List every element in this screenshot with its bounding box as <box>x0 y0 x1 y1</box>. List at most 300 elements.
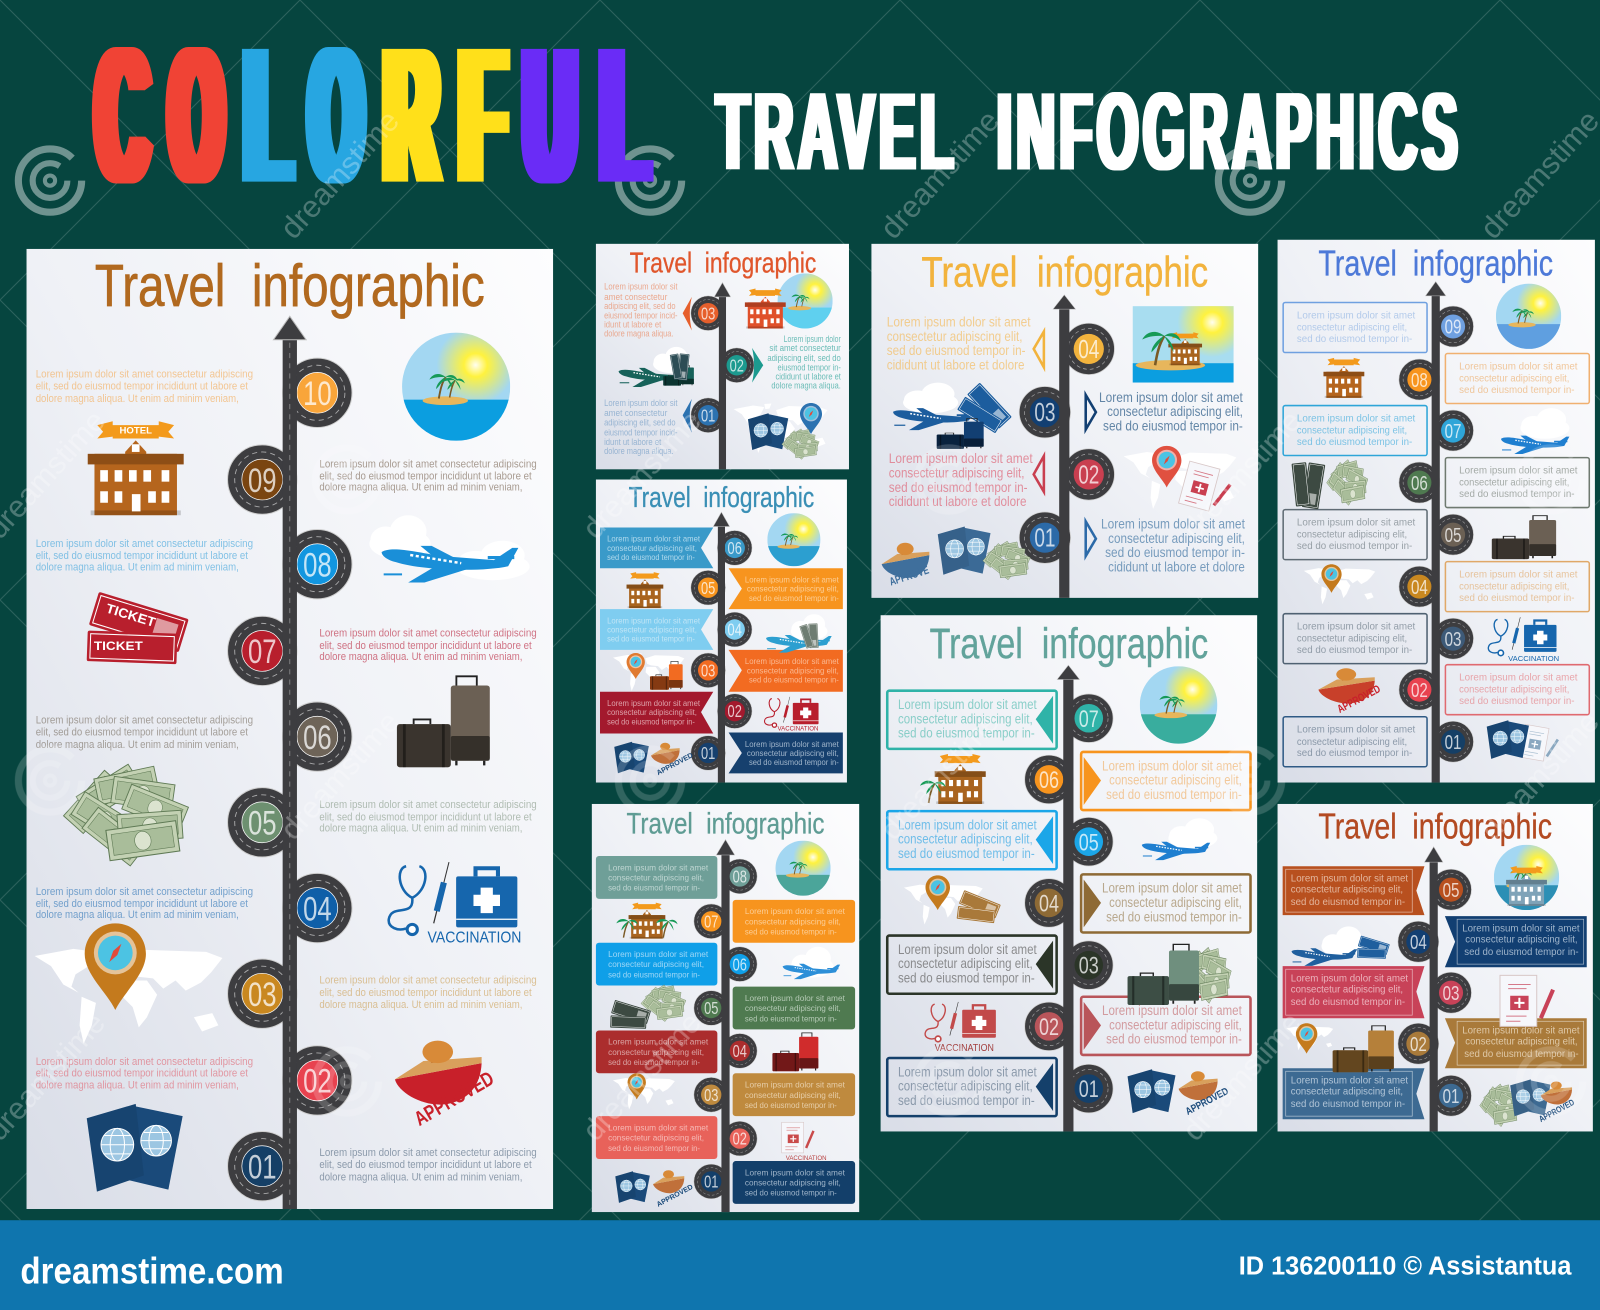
step 05: 05 <box>1079 829 1099 856</box>
step 02: 02 <box>1411 679 1428 702</box>
step 03 <box>1064 941 1113 989</box>
step 04: 04 <box>733 1041 747 1061</box>
text block 02: sit amet consectetur <box>769 343 841 353</box>
box 07: consectetur adipiscing elit, <box>1297 426 1407 437</box>
step 01: 01 <box>1443 1085 1459 1108</box>
icon: passports and stamp <box>615 1170 694 1209</box>
icon: passports and stamp: APPROVED <box>655 1183 694 1209</box>
box 08: sed do eiusmod tempor in- <box>1459 385 1574 396</box>
step 08: 08 <box>1411 369 1428 392</box>
box 06: consectetur adipiscing elit, <box>1109 773 1242 789</box>
box 05: sed do eiusmod tempor in- <box>1297 541 1412 552</box>
step 04: 04 <box>303 890 332 928</box>
step 05: 05 <box>1445 524 1461 547</box>
road with arrow <box>1424 847 1443 1131</box>
icon: plane and tickets <box>1292 926 1390 966</box>
step 09: 09 <box>248 462 277 500</box>
box 03: sed do eiusmod tempor in- <box>1297 645 1412 656</box>
step 07 <box>228 616 297 686</box>
watermarks over panels: dreamstime <box>274 104 406 245</box>
box 05: consectetur adipiscing elit, <box>898 832 1033 848</box>
box 05: sed do eiusmod tempor in- <box>745 1013 837 1023</box>
box 04: sed do eiusmod tempor in- <box>1464 947 1579 958</box>
text block 10 <box>36 368 253 405</box>
text block 03: sed do eiusmod tempor in- <box>1103 419 1243 434</box>
icon: island <box>776 837 833 896</box>
box 02: Lorem ipsum dolor sit amet <box>1102 1003 1242 1019</box>
step 01 <box>1433 721 1474 762</box>
box 05: Lorem ipsum dolor sit amet <box>1291 873 1408 884</box>
text block 03 <box>604 282 678 339</box>
box 04 <box>600 609 713 650</box>
box 05: sed do eiusmod tempor in- <box>898 846 1035 862</box>
step 05 <box>1431 869 1471 910</box>
box 07 <box>887 691 1057 749</box>
icon: plane and tickets <box>766 614 832 653</box>
text block 03 <box>319 975 537 1011</box>
box 03: consectetur adipiscing elit, <box>747 665 839 675</box>
icon: island <box>1496 280 1564 349</box>
box 03: sed do eiusmod tempor in- <box>898 971 1035 986</box>
step 07: 07 <box>704 911 718 931</box>
icon: plane <box>1501 408 1569 454</box>
step 03: 03 <box>248 976 277 1014</box>
arrow: orange <box>683 297 692 331</box>
box 01: sed do eiusmod tempor in- <box>749 757 839 767</box>
text block 04: consectetur adipiscing elit, <box>887 329 1022 344</box>
step 07: 07 <box>248 633 277 671</box>
step 08: 08 <box>303 546 332 584</box>
step 06: 06 <box>733 954 747 974</box>
text block 09 <box>319 458 537 494</box>
box 04: Lorem ipsum dolor sit amet <box>608 1037 709 1047</box>
text block 03: Lorem ipsum dolor sit amet <box>1099 390 1243 405</box>
watermarks over panels <box>0 104 1600 1147</box>
title: Travel Infographics: TRAVEL <box>716 70 958 193</box>
box 04: Lorem ipsum dolor sit amet <box>607 615 701 625</box>
road with arrow <box>273 316 306 1209</box>
icon: stamp approved: APPROVED <box>1336 683 1383 716</box>
step 08: 08 <box>733 867 747 887</box>
text block 03: idunt ut labore et <box>604 320 662 329</box>
icon: passports and insurance <box>1487 720 1559 763</box>
watermarks over panels: dreamstime <box>576 404 708 545</box>
box 03: consectetur adipiscing elit, <box>898 956 1033 972</box>
heading: main panel: Travel infographic <box>95 252 485 319</box>
box 02: Lorem ipsum dolor sit amet <box>1459 673 1578 684</box>
text block 01 <box>604 398 678 456</box>
box 05: sed do eiusmod tempor in- <box>1291 897 1405 908</box>
text block 01: consectetur adipiscing elit, <box>1108 531 1245 546</box>
box 09: consectetur adipiscing elit, <box>1297 323 1407 334</box>
text block 02: adipiscing elit, sed do <box>767 353 841 363</box>
step 03: 03 <box>1034 399 1055 427</box>
panel: filled 5-step <box>1278 804 1593 1131</box>
step 03 <box>1019 387 1071 438</box>
icon: hotel with palms <box>616 903 678 939</box>
icon: passports and stamp <box>614 742 694 777</box>
box 04: sed do eiusmod tempor in- <box>1459 593 1574 604</box>
box 02: sed do eiusmod tempor in- <box>1464 1049 1579 1060</box>
text block 03: elit, sed do eiusmod tempor incididunt ut labore et <box>319 987 532 999</box>
step 02: 02 <box>303 1063 332 1101</box>
step 07 <box>1064 694 1113 743</box>
step 02 <box>722 1121 757 1156</box>
watermarks over panels: dreamstime <box>1176 404 1308 545</box>
box 02: consectetur adipiscing elit, <box>1465 1037 1578 1048</box>
step 03: 03 <box>1079 953 1099 980</box>
text block 05: elit, sed do eiusmod tempor incididunt ut labore et <box>319 811 532 823</box>
step 03: 03 <box>1443 982 1459 1005</box>
footer credit: ID 136200110 © Assistantua <box>1239 1252 1572 1280</box>
box 01 <box>733 1161 855 1204</box>
box 05 <box>1283 510 1427 560</box>
box 08: Lorem ipsum dolor sit amet <box>1459 361 1578 372</box>
step 05 <box>1064 817 1113 866</box>
box 09: sed do eiusmod tempor in- <box>1297 334 1412 345</box>
step 01 <box>1019 512 1071 563</box>
box 03: Lorem ipsum dolor sit amet <box>898 942 1037 958</box>
step 10: 10 <box>303 375 332 413</box>
box 01: sed do eiusmod tempor in- <box>1291 1099 1405 1110</box>
text block 03: dolore magna aliqua. <box>604 329 673 339</box>
panel: orange 3-step <box>596 244 849 469</box>
box 04: consectetur adipiscing elit, <box>1465 935 1578 946</box>
box 05: consectetur adipiscing elit, <box>745 1003 841 1013</box>
step 06 <box>283 702 352 771</box>
text block 07: dolore magna aliqua. Ut enim ad minim veniam, <box>319 651 522 663</box>
step 02 <box>1399 669 1440 710</box>
text block 02: Lorem ipsum dolor sit amet <box>889 451 1033 466</box>
box 07: Lorem ipsum dolor sit amet <box>898 697 1037 713</box>
step 02: 02 <box>1039 1014 1059 1041</box>
step 06 <box>1025 755 1073 804</box>
box 05: consectetur adipiscing elit, <box>1297 530 1407 541</box>
icon: map pin tickets <box>904 875 1002 925</box>
step 02 <box>283 1046 352 1115</box>
text block 03: consectetur adipiscing elit, <box>1107 404 1243 419</box>
text block 05: dolore magna aliqua. Ut enim ad minim veniam, <box>319 823 522 835</box>
step 01 <box>1431 1075 1471 1116</box>
arrow: orange chevron <box>1034 332 1044 367</box>
text block 02: consectetur adipiscing elit, <box>889 465 1024 480</box>
text block 04 <box>36 886 253 921</box>
step 02 <box>1398 1023 1439 1064</box>
icon: hotel <box>627 572 663 608</box>
step 03: 03 <box>701 303 715 323</box>
icon: vaccination and insurance <box>782 1122 827 1162</box>
icon: hotel: HOTEL <box>119 426 152 437</box>
box 06: Lorem ipsum dolor sit amet <box>607 534 701 544</box>
step 01: 01 <box>701 405 715 425</box>
arrow: red chevron <box>1034 456 1044 492</box>
text block 01: Lorem ipsum dolor sit amet consectetur adipiscing <box>319 1147 537 1159</box>
step 05 <box>1433 514 1474 555</box>
step 03 <box>1433 618 1474 659</box>
box 03: sed do eiusmod tempor in- <box>1291 997 1405 1008</box>
step 02: 02 <box>730 355 744 375</box>
box 07: sed do eiusmod tempor in- <box>1297 437 1412 448</box>
box 07 <box>1283 406 1427 456</box>
text block 03: Lorem ipsum dolor sit amet consectetur adipiscing <box>319 975 537 987</box>
step 10 <box>283 358 352 427</box>
icon: island <box>767 510 823 566</box>
box 05 <box>733 987 855 1029</box>
text block 07: Lorem ipsum dolor sit amet consectetur adipiscing <box>319 628 537 640</box>
text block 01: Lorem ipsum dolor sit amet <box>1101 516 1245 531</box>
box 05: Lorem ipsum dolor sit amet <box>1297 517 1415 528</box>
icon: plane luggage tickets <box>619 347 695 387</box>
box 02: consectetur adipiscing elit, <box>1459 685 1569 696</box>
box 07: Lorem ipsum dolor sit amet <box>1297 413 1415 424</box>
box 04: sed do eiusmod tempor in- <box>608 1057 700 1067</box>
arrow: teal <box>752 348 763 383</box>
icon: vaccination <box>1488 617 1559 663</box>
icon: tickets: TICKET <box>94 639 143 653</box>
road with arrow <box>1426 282 1446 783</box>
text block 04: cididunt ut labore et dolore <box>887 357 1025 372</box>
box 05: Lorem ipsum dolor sit amet <box>898 817 1037 833</box>
icon: hotel with palm <box>920 754 986 804</box>
box 01 <box>1283 717 1427 767</box>
step 06: 06 <box>1411 472 1428 495</box>
step 02 <box>719 348 754 383</box>
watermarks over panels: dreamstime <box>874 705 1006 846</box>
box 02: sed do eiusmod tempor in- <box>1106 1032 1242 1048</box>
text block 02: eiusmod tempor in- <box>778 362 841 372</box>
text block 04 <box>887 314 1031 372</box>
icon: plane tickets luggage <box>893 380 1019 449</box>
box 05 <box>887 811 1057 869</box>
box 04 <box>596 1030 717 1073</box>
step 04: 04 <box>728 620 742 640</box>
text block 01: amet consectetur <box>604 408 667 418</box>
box 06 <box>1445 458 1589 508</box>
text block 08: elit, sed do eiusmod tempor incididunt ut labore et <box>36 550 248 562</box>
icon: hotel and island <box>745 270 835 329</box>
icon: island <box>402 326 515 441</box>
text block 02: cididunt ut labore et <box>776 372 841 382</box>
box 04 <box>1445 916 1587 967</box>
icon: tickets: TICKET <box>104 601 157 630</box>
text block 01: sed do eiusmod tempor in- <box>1105 545 1245 560</box>
icon: hotel <box>88 421 184 515</box>
road with arrow <box>716 840 735 1212</box>
road with arrow <box>713 512 730 783</box>
box 02: Lorem ipsum dolor sit amet <box>1462 1026 1580 1037</box>
step 02: 02 <box>1078 461 1099 489</box>
text block 03: dolore magna aliqua. Ut enim ad minim veniam, <box>319 999 522 1011</box>
panel: yellow 4-step <box>871 244 1258 598</box>
icon: passports and stamp <box>1128 1069 1231 1118</box>
box 07 <box>733 900 855 943</box>
box 01: sed do eiusmod tempor in- <box>898 1093 1035 1109</box>
title: COLORFUL: O <box>310 7 362 223</box>
box 04: consectetur adipiscing elit, <box>608 1047 704 1057</box>
box 08: consectetur adipiscing elit, <box>1459 374 1569 385</box>
step 01: 01 <box>1034 525 1055 553</box>
icon: vaccination: VACCINATION <box>935 1043 994 1054</box>
icon: luggage and money <box>1128 944 1231 1005</box>
step 03 <box>691 653 726 688</box>
box 01: consectetur adipiscing elit, <box>898 1079 1033 1095</box>
text block 03: amet consectetur <box>604 292 667 302</box>
icon: map pin insurance <box>1124 446 1236 515</box>
icon: stamp passports money: APPROVE <box>888 564 931 588</box>
text block 01: idunt ut labore et <box>604 437 662 447</box>
box 06: sed do eiusmod tempor in- <box>1106 787 1242 803</box>
step 07: 07 <box>1445 420 1461 443</box>
text block 09: dolore magna aliqua. Ut enim ad minim veniam, <box>319 482 522 494</box>
box 02: Lorem ipsum dolor sit amet <box>607 698 701 708</box>
text block 07 <box>319 628 537 663</box>
watermarks over panels: dreamstime <box>874 104 1006 245</box>
step 01 <box>691 398 726 433</box>
step 06: 06 <box>728 538 742 558</box>
box 03: sed do eiusmod tempor in- <box>745 1100 837 1110</box>
box 04: Lorem ipsum dolor sit amet <box>1102 881 1242 897</box>
box 01: sed do eiusmod tempor in- <box>1297 748 1412 759</box>
box 06 <box>600 527 713 568</box>
text block 03 <box>1099 390 1243 434</box>
title: COLORFUL: O <box>170 7 222 223</box>
title: COLORFUL: U <box>524 7 576 223</box>
box 05: consectetur adipiscing elit, <box>747 584 839 594</box>
text block 04: Lorem ipsum dolor sit amet <box>887 314 1031 329</box>
box 07: consectetur adipiscing elit, <box>898 711 1033 727</box>
box 05 <box>729 568 843 609</box>
icon: plane <box>783 947 840 979</box>
step 04: 04 <box>1039 890 1059 917</box>
step 06 <box>722 947 757 981</box>
heading: Travel infographic <box>629 482 814 514</box>
box 05: consectetur adipiscing elit, <box>1291 885 1403 896</box>
step 01 <box>691 736 726 770</box>
step 03 <box>691 296 726 331</box>
step 04: 04 <box>1078 336 1099 364</box>
heading: Travel infographic <box>627 808 825 841</box>
box 01 <box>887 1058 1057 1116</box>
step 03 <box>228 959 297 1028</box>
step 02 <box>1025 1002 1073 1051</box>
step 02: 02 <box>1410 1033 1427 1056</box>
box 08 <box>1445 354 1589 404</box>
step 06: 06 <box>303 719 332 757</box>
road with arrow <box>1053 295 1076 598</box>
box 03: Lorem ipsum dolor sit amet <box>1297 621 1415 632</box>
text block 07: elit, sed do eiusmod tempor incididunt ut labore et <box>319 640 532 652</box>
icon: island with hotel <box>1494 841 1562 910</box>
step 01: 01 <box>704 1172 718 1192</box>
box 01: Lorem ipsum dolor sit amet <box>745 1167 845 1177</box>
box 01: consectetur adipiscing elit, <box>1291 1087 1403 1098</box>
step 01 <box>694 1164 729 1199</box>
text block 08: dolore magna aliqua. Ut enim ad minim veniam, <box>36 561 239 573</box>
text block 02: sed do eiusmod tempor in- <box>889 480 1028 495</box>
icon: vaccination: VACCINATION <box>1508 654 1559 663</box>
text block 08: Lorem ipsum dolor sit amet consectetur adipiscing <box>36 538 253 550</box>
step 06: 06 <box>1039 767 1059 794</box>
box 01: consectetur adipiscing elit, <box>1297 737 1407 748</box>
box 04: Lorem ipsum dolor sit amet <box>1459 569 1578 580</box>
arrow: blue chevron <box>1086 521 1096 556</box>
text block 02: cididunt ut labore et dolore <box>889 494 1027 509</box>
step 02: 02 <box>728 701 742 721</box>
step 07: 07 <box>1079 706 1099 733</box>
text block 10: Lorem ipsum dolor sit amet consectetur adipiscing <box>36 368 253 380</box>
box 05 <box>1283 866 1424 915</box>
box 02: Lorem ipsum dolor sit amet <box>608 1122 709 1132</box>
icon: plane with clouds <box>369 515 530 583</box>
text block 09: Lorem ipsum dolor sit amet consectetur adipiscing <box>319 458 537 470</box>
step 03 <box>1431 972 1471 1013</box>
text block 01: eiusmod tempor incid- <box>604 428 678 438</box>
step 04 <box>1025 879 1073 927</box>
box 03: consectetur adipiscing elit, <box>745 1090 841 1100</box>
box 01: consectetur adipiscing elit, <box>747 748 839 758</box>
box 08: Lorem ipsum dolor sit amet <box>608 862 709 872</box>
text block 10: dolore magna aliqua. Ut enim ad minim veniam, <box>36 393 239 405</box>
box 05: Lorem ipsum dolor sit amet <box>745 993 845 1003</box>
text block 05 <box>319 799 537 835</box>
text block 04: dolore magna aliqua. Ut enim ad minim veniam, <box>36 909 239 921</box>
icon: pin and luggage <box>1286 1023 1394 1072</box>
road with arrow <box>1057 665 1080 1131</box>
step 06 <box>1399 462 1440 503</box>
step 05: 05 <box>704 998 718 1018</box>
step 01: 01 <box>1445 731 1461 754</box>
step 03: 03 <box>701 660 715 680</box>
text block 02 <box>767 334 841 391</box>
step 04 <box>717 612 752 647</box>
box 01: Lorem ipsum dolor sit amet <box>898 1064 1037 1080</box>
title: COLORFUL: R <box>385 7 438 223</box>
box 04 <box>1445 562 1589 612</box>
text block 03: eiusmod tempor incid- <box>604 310 678 320</box>
text block 02: dolore magna aliqua. <box>771 381 841 391</box>
box 04: consectetur adipiscing elit, <box>607 625 697 635</box>
box 03 <box>1283 966 1424 1018</box>
box 02: sed do eiusmod tempor in- <box>1459 696 1574 707</box>
box 06: consectetur adipiscing elit, <box>607 543 697 553</box>
step 02: 02 <box>733 1129 747 1149</box>
step 04: 04 <box>1410 931 1427 954</box>
step 05: 05 <box>1443 879 1459 902</box>
icon: passports and stamp: APPROVED <box>655 751 694 777</box>
box 04: consectetur adipiscing elit, <box>1459 582 1569 593</box>
box 07: Lorem ipsum dolor sit amet <box>745 906 845 916</box>
icon: money <box>64 764 188 866</box>
box 03: Lorem ipsum dolor sit amet <box>745 656 839 666</box>
icon: vaccination: VACCINATION <box>778 725 818 732</box>
panel: main 10-step infographic <box>27 249 553 1209</box>
box 02 <box>1081 997 1251 1055</box>
text block 04: sed do eiusmod tempor in- <box>887 343 1026 358</box>
box 02: sed do eiusmod tempor in- <box>608 1143 700 1153</box>
box 06 <box>1081 752 1251 810</box>
step 04: 04 <box>1411 576 1428 599</box>
text block 01: dolore magna aliqua. Ut enim ad minim veniam, <box>319 1171 522 1183</box>
box 01 <box>729 733 843 773</box>
icon: location pin <box>85 923 146 1010</box>
icon: insurance <box>1500 975 1553 1026</box>
text block 03: Lorem ipsum dolor sit <box>604 282 678 292</box>
icon: hotel <box>1323 358 1364 398</box>
step 07 <box>1433 410 1474 451</box>
step 04 <box>283 873 352 943</box>
watermarks over panels: dreamstime <box>576 1006 708 1147</box>
box 03 <box>887 936 1057 994</box>
